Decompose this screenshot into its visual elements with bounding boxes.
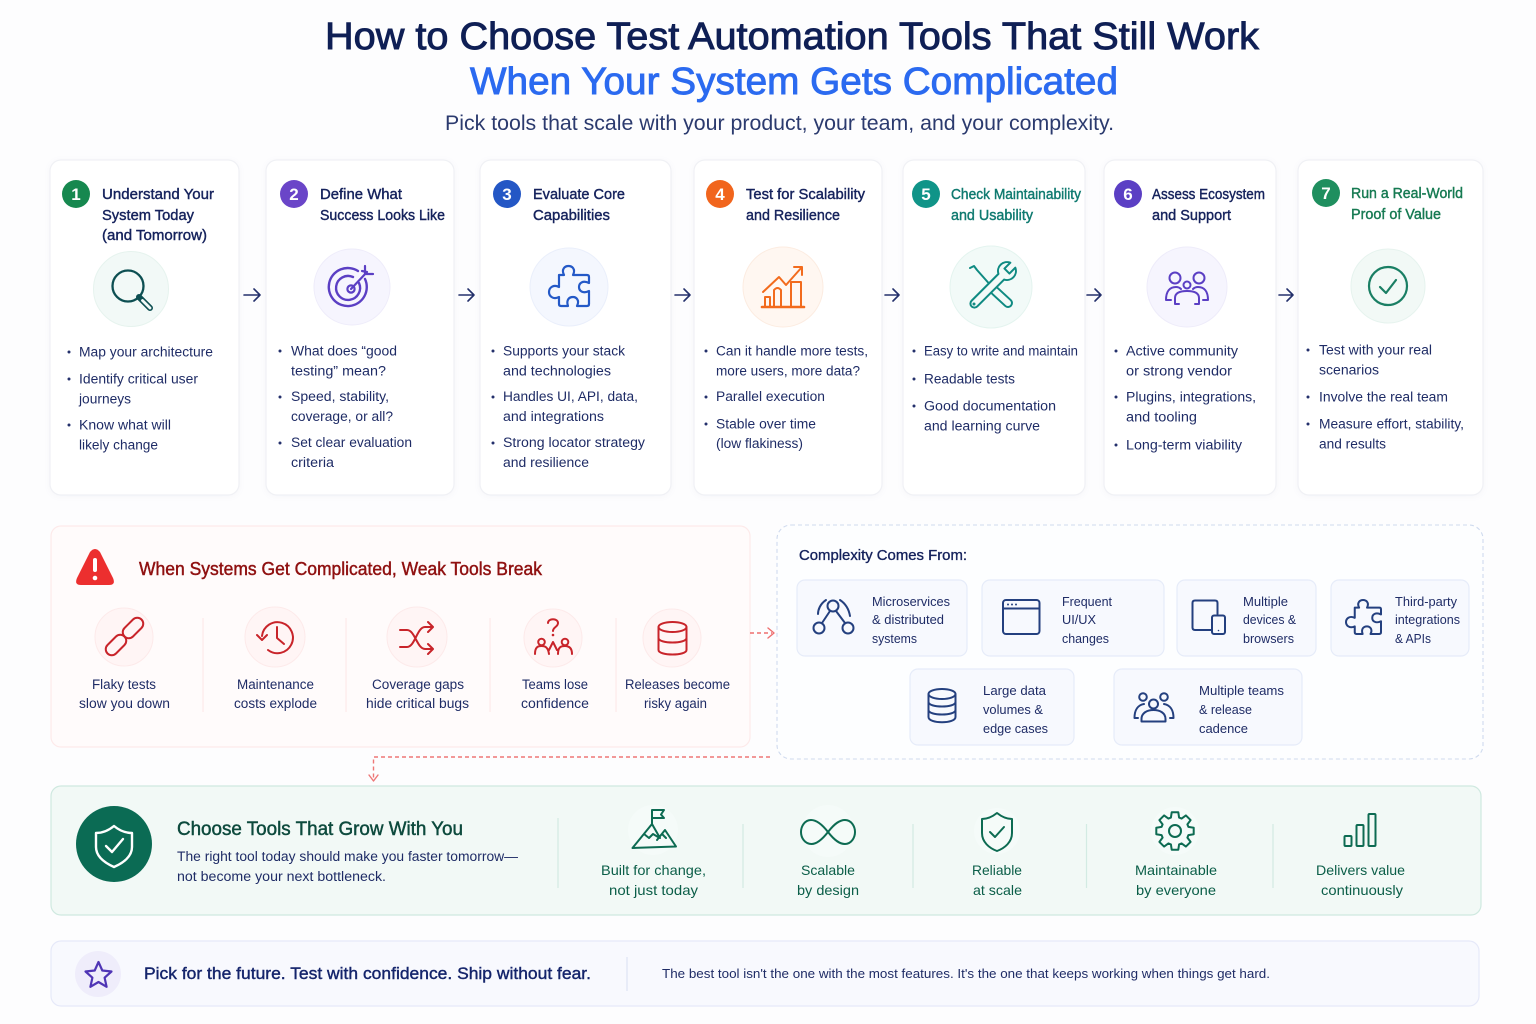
item: devices and browsers	[1177, 580, 1316, 656]
step 3 bullets	[492, 344, 645, 470]
item: multiple teams: cadence	[1199, 722, 1248, 736]
step 2 badge: 2	[289, 185, 299, 204]
step 7 bullets: scenarios	[1319, 362, 1379, 378]
step 3 bullets: Handles UI, API, data,	[503, 389, 638, 404]
step 3 bullets: and resilience	[503, 455, 589, 470]
step 2 heading: Define What	[320, 187, 402, 203]
step 7 heading: Run a Real-World	[1351, 186, 1463, 202]
item: reliable at scale: at scale	[973, 882, 1022, 898]
panel: choose tools that grow	[51, 786, 1481, 915]
item: risky releases	[625, 609, 730, 711]
step 5 bullets: Easy to write and maintain	[924, 344, 1078, 358]
item: third-party integrations: integrations	[1395, 613, 1460, 627]
step 7 bullets: Measure effort, stability,	[1319, 416, 1464, 432]
item: maintainable by everyone	[1135, 807, 1217, 898]
step 1 bullets: Know what will	[79, 418, 171, 432]
icon: warning triangle	[76, 549, 114, 585]
item: large data	[910, 669, 1074, 745]
step 1 heading	[102, 187, 214, 244]
item: maintenance costs	[234, 607, 317, 711]
step 1 heading: System Today	[102, 208, 195, 224]
step 6 bullets: and tooling	[1126, 410, 1197, 424]
icon: target	[314, 249, 390, 325]
icon: shield badge	[76, 806, 152, 882]
item: coverage gaps: hide critical bugs	[366, 696, 469, 711]
panel: step 2	[266, 160, 454, 495]
item: multiple teams: Multiple teams	[1199, 684, 1284, 698]
connector: complexity to solution	[369, 757, 770, 781]
step 3 badge: 3	[502, 185, 512, 204]
item: UI/UX changes: changes	[1062, 632, 1109, 646]
step 5 heading: Check Maintainability	[951, 187, 1082, 203]
item: delivers value: Delivers value	[1316, 862, 1405, 878]
item: microservices	[797, 580, 967, 656]
step 4 bullets: (low flakiness)	[716, 436, 803, 451]
item: UI/UX changes: Frequent	[1062, 595, 1113, 609]
step 3 badge	[493, 180, 521, 208]
step 2 bullets: Speed, stability,	[291, 389, 389, 404]
item: flaky tests	[79, 608, 170, 711]
step 1 bullets: Map your architecture	[79, 344, 213, 360]
step 4 badge: 4	[715, 185, 725, 204]
step 3 heading	[533, 187, 625, 224]
step 1 heading: Understand Your	[102, 187, 214, 203]
closing tagline: Pick for the future. Test with confidence. Ship without fear.	[144, 964, 591, 983]
step 2 bullets: criteria	[291, 455, 335, 470]
item: built for change: Built for change,	[601, 862, 706, 878]
solution text: not become your next bottleneck.	[177, 869, 386, 884]
item: maintainable by everyone: Maintainable	[1135, 862, 1217, 878]
item: UI/UX changes	[982, 580, 1164, 656]
item: risky releases: risky again	[644, 696, 707, 711]
item: microservices: systems	[872, 632, 917, 646]
item: multiple teams	[1114, 669, 1302, 745]
solution text	[177, 819, 519, 884]
step 5 badge	[912, 180, 940, 208]
item: devices and browsers: devices &	[1243, 613, 1297, 627]
panel: step 3	[480, 160, 671, 495]
item: built for change: not just today	[609, 882, 698, 898]
item: scalable by design	[797, 805, 859, 898]
item: microservices: Microservices	[872, 595, 950, 609]
step 1 heading: (and Tomorrow)	[102, 228, 207, 244]
solution text: The right tool today should make you faster tomorrow—	[177, 849, 519, 864]
step 4 bullets: Can it handle more tests,	[716, 344, 868, 358]
step 6 badge	[1114, 180, 1142, 208]
item: teams lose confidence	[521, 609, 589, 711]
item: large data: Large data	[983, 684, 1046, 698]
step 7 badge	[1312, 179, 1340, 207]
item: large data: edge cases	[983, 722, 1048, 736]
step 7 badge: 7	[1321, 184, 1331, 203]
panel: step 1	[50, 160, 239, 495]
step 3 bullets: Strong locator strategy	[503, 435, 645, 450]
step 5 badge: 5	[921, 185, 931, 204]
step 4 heading: Test for Scalability	[746, 187, 866, 203]
weak tools heading: When Systems Get Complicated, Weak Tools Break	[139, 559, 543, 579]
closing note: The best tool isn't the one with the most features. It's the one that keeps working when things get hard.	[662, 966, 1270, 981]
item: third-party integrations	[1331, 580, 1469, 656]
step 1 bullets: Identify critical user	[79, 372, 199, 386]
step 6 badge: 6	[1123, 185, 1133, 204]
item: multiple teams: & release	[1199, 703, 1252, 717]
step 6 bullets	[1114, 344, 1256, 452]
step 5 bullets: Good documentation	[924, 398, 1056, 414]
step 2 bullets: Set clear evaluation	[291, 435, 412, 450]
step 1 badge: 1	[71, 185, 81, 204]
connector: weak tools to complexity	[750, 628, 774, 638]
step 2 badge	[280, 180, 308, 208]
item: reliable at scale: Reliable	[972, 862, 1022, 878]
step 2 heading	[320, 187, 445, 224]
icon: community	[1147, 247, 1227, 327]
step 4 heading: and Resilience	[746, 208, 840, 224]
step 7 heading: Proof of Value	[1351, 207, 1441, 223]
step 5 bullets: and learning curve	[924, 418, 1040, 434]
panel: complexity comes from	[777, 525, 1483, 759]
step 4 bullets: more users, more data?	[716, 364, 860, 378]
item: risky releases: Releases become	[625, 677, 730, 692]
item: delivers value: continuously	[1321, 882, 1403, 898]
panel: step 5	[903, 160, 1085, 495]
panel: step 7	[1298, 160, 1483, 495]
item: scalable by design: Scalable	[801, 862, 855, 878]
item: coverage gaps: Coverage gaps	[372, 677, 464, 692]
item: devices and browsers: browsers	[1243, 632, 1294, 646]
step 7 bullets: and results	[1319, 436, 1386, 452]
step 4 bullets: Parallel execution	[716, 389, 825, 404]
step 2 heading: Success Looks Like	[320, 208, 445, 224]
arrow: step 2 to 3	[459, 289, 474, 301]
step 3 bullets: and integrations	[503, 409, 604, 424]
panel: step 6	[1104, 160, 1276, 495]
icon: star	[75, 951, 121, 997]
step 6 bullets: Active community	[1126, 344, 1238, 358]
title: How to Choose Test Automation Tools That Still Work	[325, 16, 1260, 58]
item: built for change	[601, 805, 706, 898]
item: flaky tests: slow you down	[79, 696, 170, 711]
item: large data: volumes &	[983, 703, 1044, 717]
item: UI/UX changes: UI/UX	[1062, 613, 1097, 627]
item: coverage gaps	[366, 607, 469, 711]
step 3 bullets: and technologies	[503, 364, 611, 378]
step 2 bullets: testing” mean?	[291, 364, 386, 378]
step 2 bullets: What does “good	[291, 344, 397, 358]
step 6 bullets: or strong vendor	[1126, 364, 1233, 378]
arrow: step 3 to 4	[675, 289, 690, 301]
solution text: Choose Tools That Grow With You	[177, 819, 463, 840]
step 5 bullets	[912, 344, 1078, 434]
step 3 bullets: Supports your stack	[503, 344, 625, 358]
step 5 heading: and Usability	[951, 208, 1034, 224]
step 1 badge	[62, 180, 90, 208]
item: maintainable by everyone: by everyone	[1136, 882, 1216, 898]
item: teams lose confidence: Teams lose	[522, 677, 588, 692]
item: devices and browsers: Multiple	[1243, 595, 1288, 609]
icon: growth chart	[743, 247, 823, 327]
step 4 heading	[746, 187, 866, 224]
step 3 heading: Evaluate Core	[533, 187, 625, 203]
arrow: step 1 to 2	[244, 289, 260, 301]
item: reliable at scale	[972, 808, 1022, 898]
step 1 bullets: journeys	[78, 392, 131, 406]
step 7 heading	[1351, 186, 1463, 223]
step 5 heading	[951, 187, 1082, 224]
step 7 bullets	[1306, 342, 1464, 452]
icon: puzzle piece	[530, 248, 608, 326]
item: teams lose confidence: confidence	[521, 696, 589, 711]
item: scalable by design: by design	[797, 882, 859, 898]
step 6 heading: and Support	[1152, 208, 1231, 224]
step 3 heading: Capabilities	[533, 208, 610, 224]
item: delivers value	[1316, 814, 1405, 898]
item: third-party integrations: Third-party	[1395, 595, 1458, 609]
item: microservices: & distributed	[872, 613, 944, 627]
step 6 heading	[1152, 187, 1265, 224]
arrow: step 4 to 5	[885, 289, 899, 301]
title	[325, 16, 1260, 103]
step 4 bullets	[704, 344, 868, 451]
icon: magnifier	[94, 252, 168, 326]
icon: check circle	[1351, 249, 1425, 323]
step 4 bullets: Stable over time	[716, 416, 816, 432]
step 5 bullets: Readable tests	[924, 372, 1015, 386]
complexity heading: Complexity Comes From:	[799, 548, 967, 564]
panel: step 4	[694, 160, 882, 495]
arrow: step 5 to 6	[1087, 289, 1101, 301]
step 2 bullets	[278, 344, 412, 470]
item: flaky tests: Flaky tests	[92, 677, 156, 692]
arrow: step 6 to 7	[1279, 289, 1293, 301]
title: When Your System Gets Complicated	[470, 61, 1118, 103]
step 7 bullets: Involve the real team	[1319, 390, 1448, 404]
step 6 heading: Assess Ecosystem	[1152, 187, 1265, 203]
panel: weak tools break	[51, 526, 750, 747]
step 6 bullets: Long-term viability	[1126, 438, 1242, 452]
step 2 bullets: coverage, or all?	[291, 409, 393, 424]
step 7 bullets: Test with your real	[1319, 342, 1432, 358]
item: maintenance costs: costs explode	[234, 696, 317, 711]
subtitle: Pick tools that scale with your product, your team, and your complexity.	[445, 112, 1114, 135]
icon: tools	[950, 246, 1032, 328]
step 6 bullets: Plugins, integrations,	[1126, 390, 1256, 404]
step 4 badge	[706, 180, 734, 208]
item: third-party integrations: & APIs	[1395, 632, 1431, 646]
step 1 bullets: likely change	[79, 438, 158, 452]
step 1 bullets	[68, 344, 213, 452]
panel: closing banner	[51, 941, 1479, 1006]
item: maintenance costs: Maintenance	[237, 677, 314, 692]
